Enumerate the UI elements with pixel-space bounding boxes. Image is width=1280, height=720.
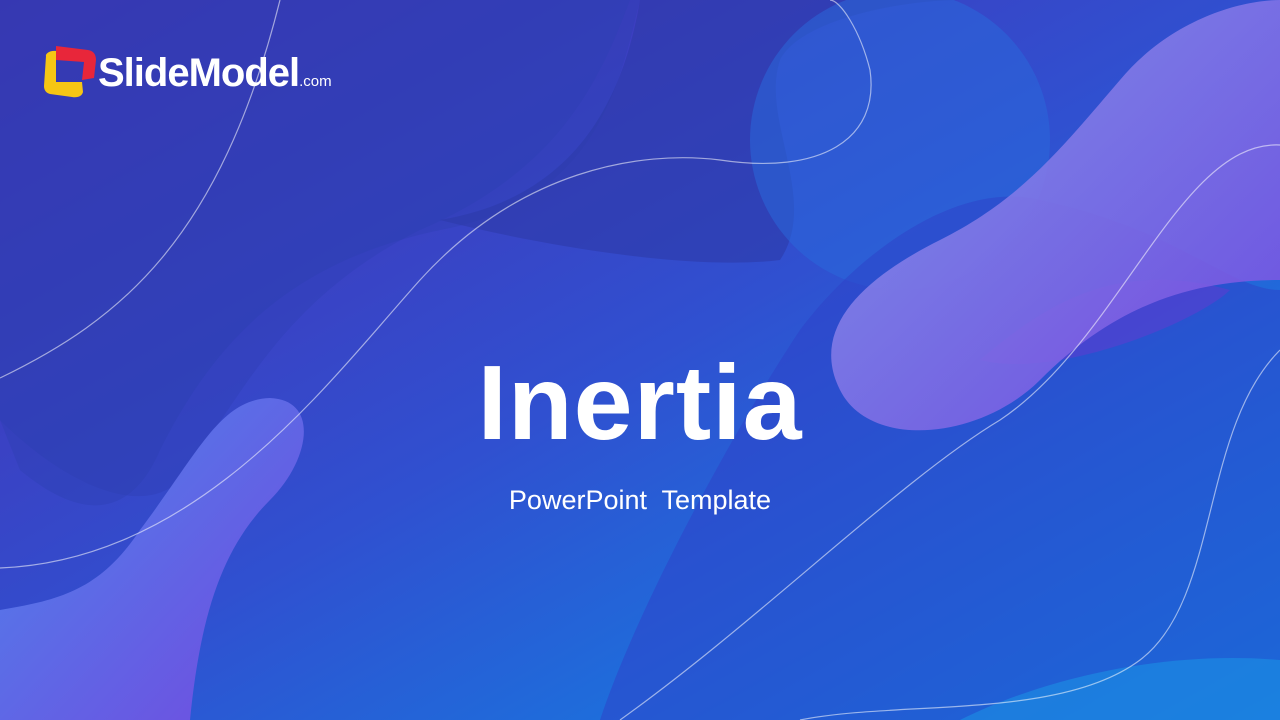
title: Inertia (477, 344, 803, 462)
logo text: SlideModel.com (98, 51, 332, 95)
logo (44, 46, 332, 98)
subtitle: PowerPoint Template (509, 485, 771, 515)
icon: logo mark (44, 46, 96, 98)
